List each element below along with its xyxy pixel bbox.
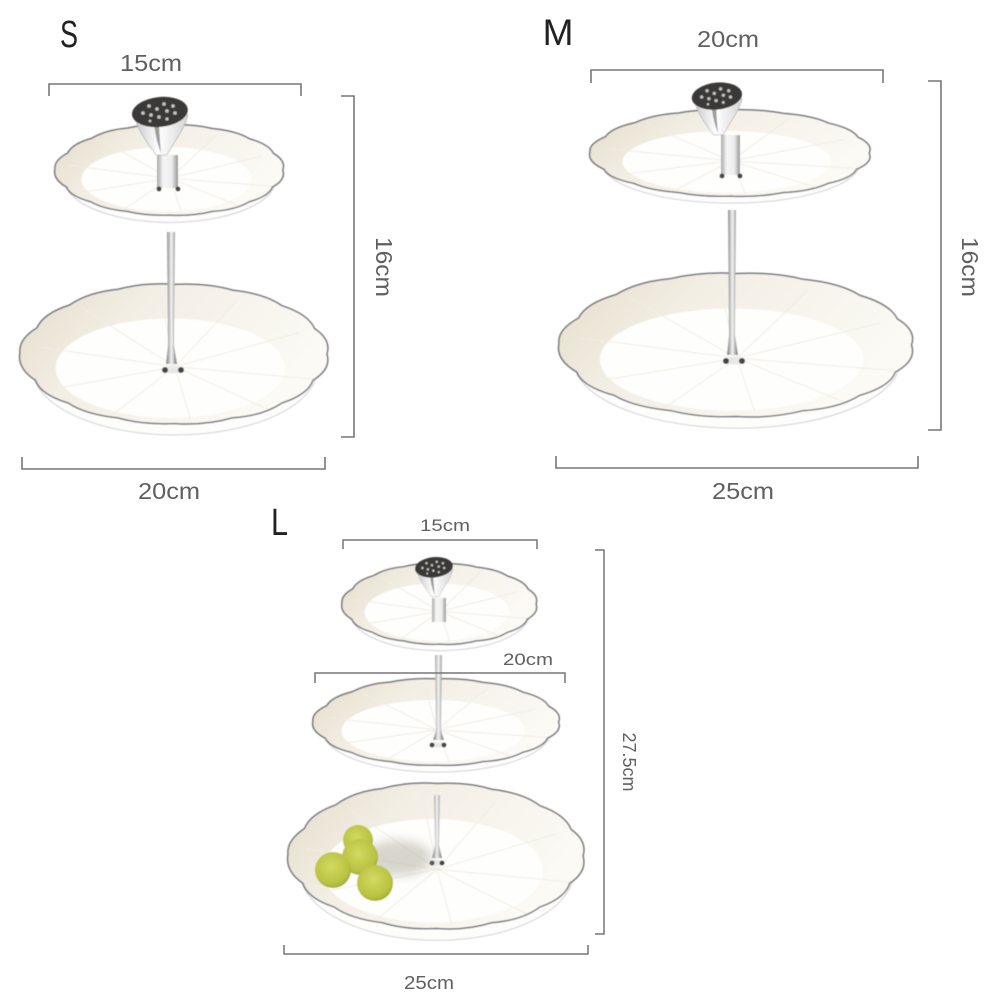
size L stand	[288, 555, 584, 940]
dimension: S top 15cm	[49, 50, 301, 96]
S pole base	[161, 366, 184, 374]
L top plate	[342, 564, 537, 651]
M pole upper	[721, 135, 740, 175]
icon: green grapes	[315, 825, 393, 901]
L pole bottom	[432, 795, 442, 858]
dimension: L height 27.5cm	[595, 550, 639, 934]
S pole upper	[157, 155, 178, 188]
S lotus knob	[130, 94, 189, 155]
heading: size L: L	[271, 502, 288, 544]
size M stand	[558, 80, 913, 428]
L pole middle	[433, 655, 444, 740]
dimension: S height 16cm	[341, 96, 397, 437]
dimension: S bottom 20cm: 20cm	[138, 478, 200, 504]
dimension: L middle 20cm: 20cm	[503, 650, 553, 669]
grape shadow	[364, 840, 432, 876]
M pole lower	[727, 210, 738, 355]
M lotus knob	[690, 80, 743, 135]
S bottom plate	[20, 284, 328, 435]
L middle plate	[313, 679, 559, 772]
L pole top	[432, 598, 446, 622]
M bottom plate	[558, 273, 913, 428]
dimension: M top 20cm	[591, 26, 883, 83]
L bottom plate	[288, 783, 584, 940]
size S stand	[20, 94, 328, 435]
heading: size S: S	[60, 14, 78, 56]
dimension: S height 16cm: 16cm	[371, 237, 397, 297]
dimension: S top 15cm: 15cm	[120, 50, 182, 76]
S pole lower	[166, 232, 177, 364]
dimension: L middle 20cm	[315, 650, 565, 683]
dimension: M height 16cm: 16cm	[957, 237, 983, 297]
dimension: M top 20cm: 20cm	[697, 26, 759, 52]
dimension: S bottom 20cm	[22, 457, 325, 504]
dimension: M bottom 25cm: 25cm	[712, 478, 774, 504]
dimension: M height 16cm	[928, 81, 983, 430]
dimension: L top 15cm: 15cm	[420, 516, 470, 535]
dimension: L height 27.5cm: 27.5cm	[619, 732, 639, 792]
dimension: M bottom 25cm	[556, 456, 918, 504]
M top plate	[590, 110, 870, 203]
dimension: L bottom 25cm: 25cm	[404, 973, 454, 993]
L lotus knob	[414, 555, 454, 597]
S top plate	[55, 125, 283, 222]
dimension: L bottom 25cm	[284, 945, 588, 993]
dimension: L top 15cm	[343, 516, 537, 549]
heading: size M: M	[543, 12, 573, 53]
